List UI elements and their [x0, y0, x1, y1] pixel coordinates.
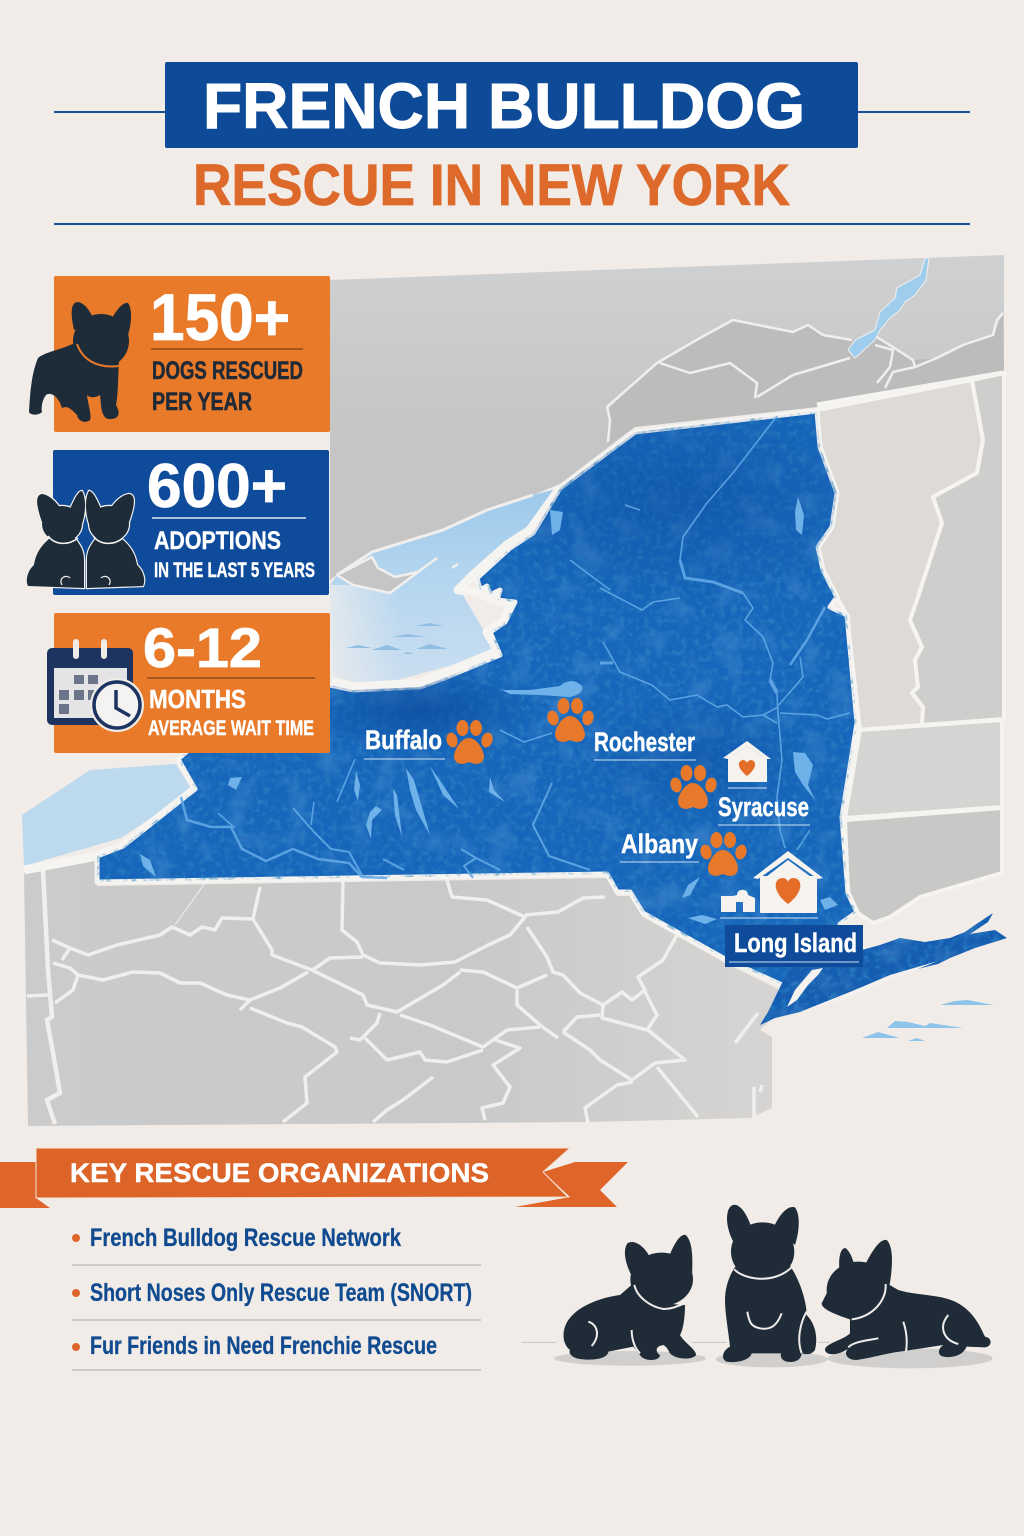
neighbouring land north	[330, 255, 1004, 580]
icon: paw Buffalo	[445, 720, 494, 764]
state shading and texture	[90, 390, 1010, 1035]
city label: Albany: Albany	[621, 829, 698, 859]
list item: Fur Friends	[72, 1332, 481, 1370]
lakes	[140, 497, 838, 924]
Long Island	[760, 913, 1007, 1025]
St Lawrence river	[848, 258, 929, 358]
list item: French Bulldog Rescue Network: French Bulldog Rescue Network	[90, 1224, 401, 1252]
dog right	[822, 1240, 991, 1360]
stat value: 6-12	[143, 616, 262, 679]
neighbouring land south	[24, 858, 780, 1126]
Lake Erie	[22, 764, 192, 866]
icon: paw Rochester	[546, 698, 595, 742]
icon: two sitting dogs	[27, 491, 144, 588]
stat label: AVERAGE WAIT TIME	[148, 717, 314, 740]
ribbon heading	[0, 1148, 628, 1208]
north shore	[337, 495, 533, 575]
map of New York and neighbouring regions	[22, 255, 1010, 1126]
stat value: 150+	[150, 280, 290, 354]
stat card: adoptions	[27, 450, 329, 595]
icon: calendar and clock	[47, 642, 144, 732]
icon: small house with heart	[723, 741, 771, 788]
Long Island slits	[787, 961, 938, 1012]
title banner: FRENCH BULLDOG	[203, 70, 805, 142]
stat label	[148, 684, 314, 740]
Lake Ontario	[330, 488, 560, 692]
dog left	[564, 1235, 696, 1360]
list of organizations	[72, 1224, 481, 1370]
city label: Long Island	[725, 925, 863, 967]
list item: Fur Friends: Fur Friends in Need Frenchie Rescue	[90, 1332, 437, 1360]
lake ripples	[346, 623, 448, 654]
stat label: ADOPTIONS	[154, 527, 281, 555]
stat card: wait time	[47, 613, 330, 753]
Ontario and Erie shoreline	[24, 488, 560, 870]
dog centre	[723, 1205, 816, 1362]
neighbouring land east	[817, 373, 1004, 923]
city label: Buffalo: Buffalo	[365, 725, 442, 755]
stat label: MONTHS	[149, 684, 246, 714]
ribbon heading: KEY RESCUE ORGANIZATIONS	[70, 1158, 489, 1188]
city label: Rochester: Rochester	[594, 727, 695, 757]
city label: Long Island: Long Island	[734, 928, 857, 958]
title banner	[54, 62, 970, 148]
icon: standing dog	[29, 302, 131, 422]
stat card: dogs rescued	[29, 276, 330, 432]
peninsula	[337, 557, 418, 593]
stat label	[154, 527, 315, 582]
stat label: DOGS RESCUED	[152, 357, 303, 385]
New York state	[97, 411, 864, 985]
three bulldog silhouettes	[522, 1205, 993, 1368]
stat label	[152, 357, 303, 416]
sound ripples	[862, 1000, 993, 1041]
icon: paw Syracuse	[669, 765, 718, 809]
icon: large house with heart and suitcase	[720, 851, 823, 918]
stat label: PER YEAR	[152, 388, 252, 416]
list item: SNORT: Short Noses Only Rescue Team (SNORT)	[90, 1279, 472, 1307]
stat label: IN THE LAST 5 YEARS	[154, 559, 315, 582]
rivers	[181, 416, 850, 878]
stat value: 600+	[147, 452, 287, 521]
subtitle: RESCUE IN NEW YORK	[193, 153, 790, 218]
list item: French Bulldog Rescue Network	[72, 1224, 481, 1265]
list item: SNORT	[72, 1279, 481, 1320]
city label: Syracuse: Syracuse	[718, 792, 809, 822]
icon: paw Albany	[699, 832, 748, 876]
